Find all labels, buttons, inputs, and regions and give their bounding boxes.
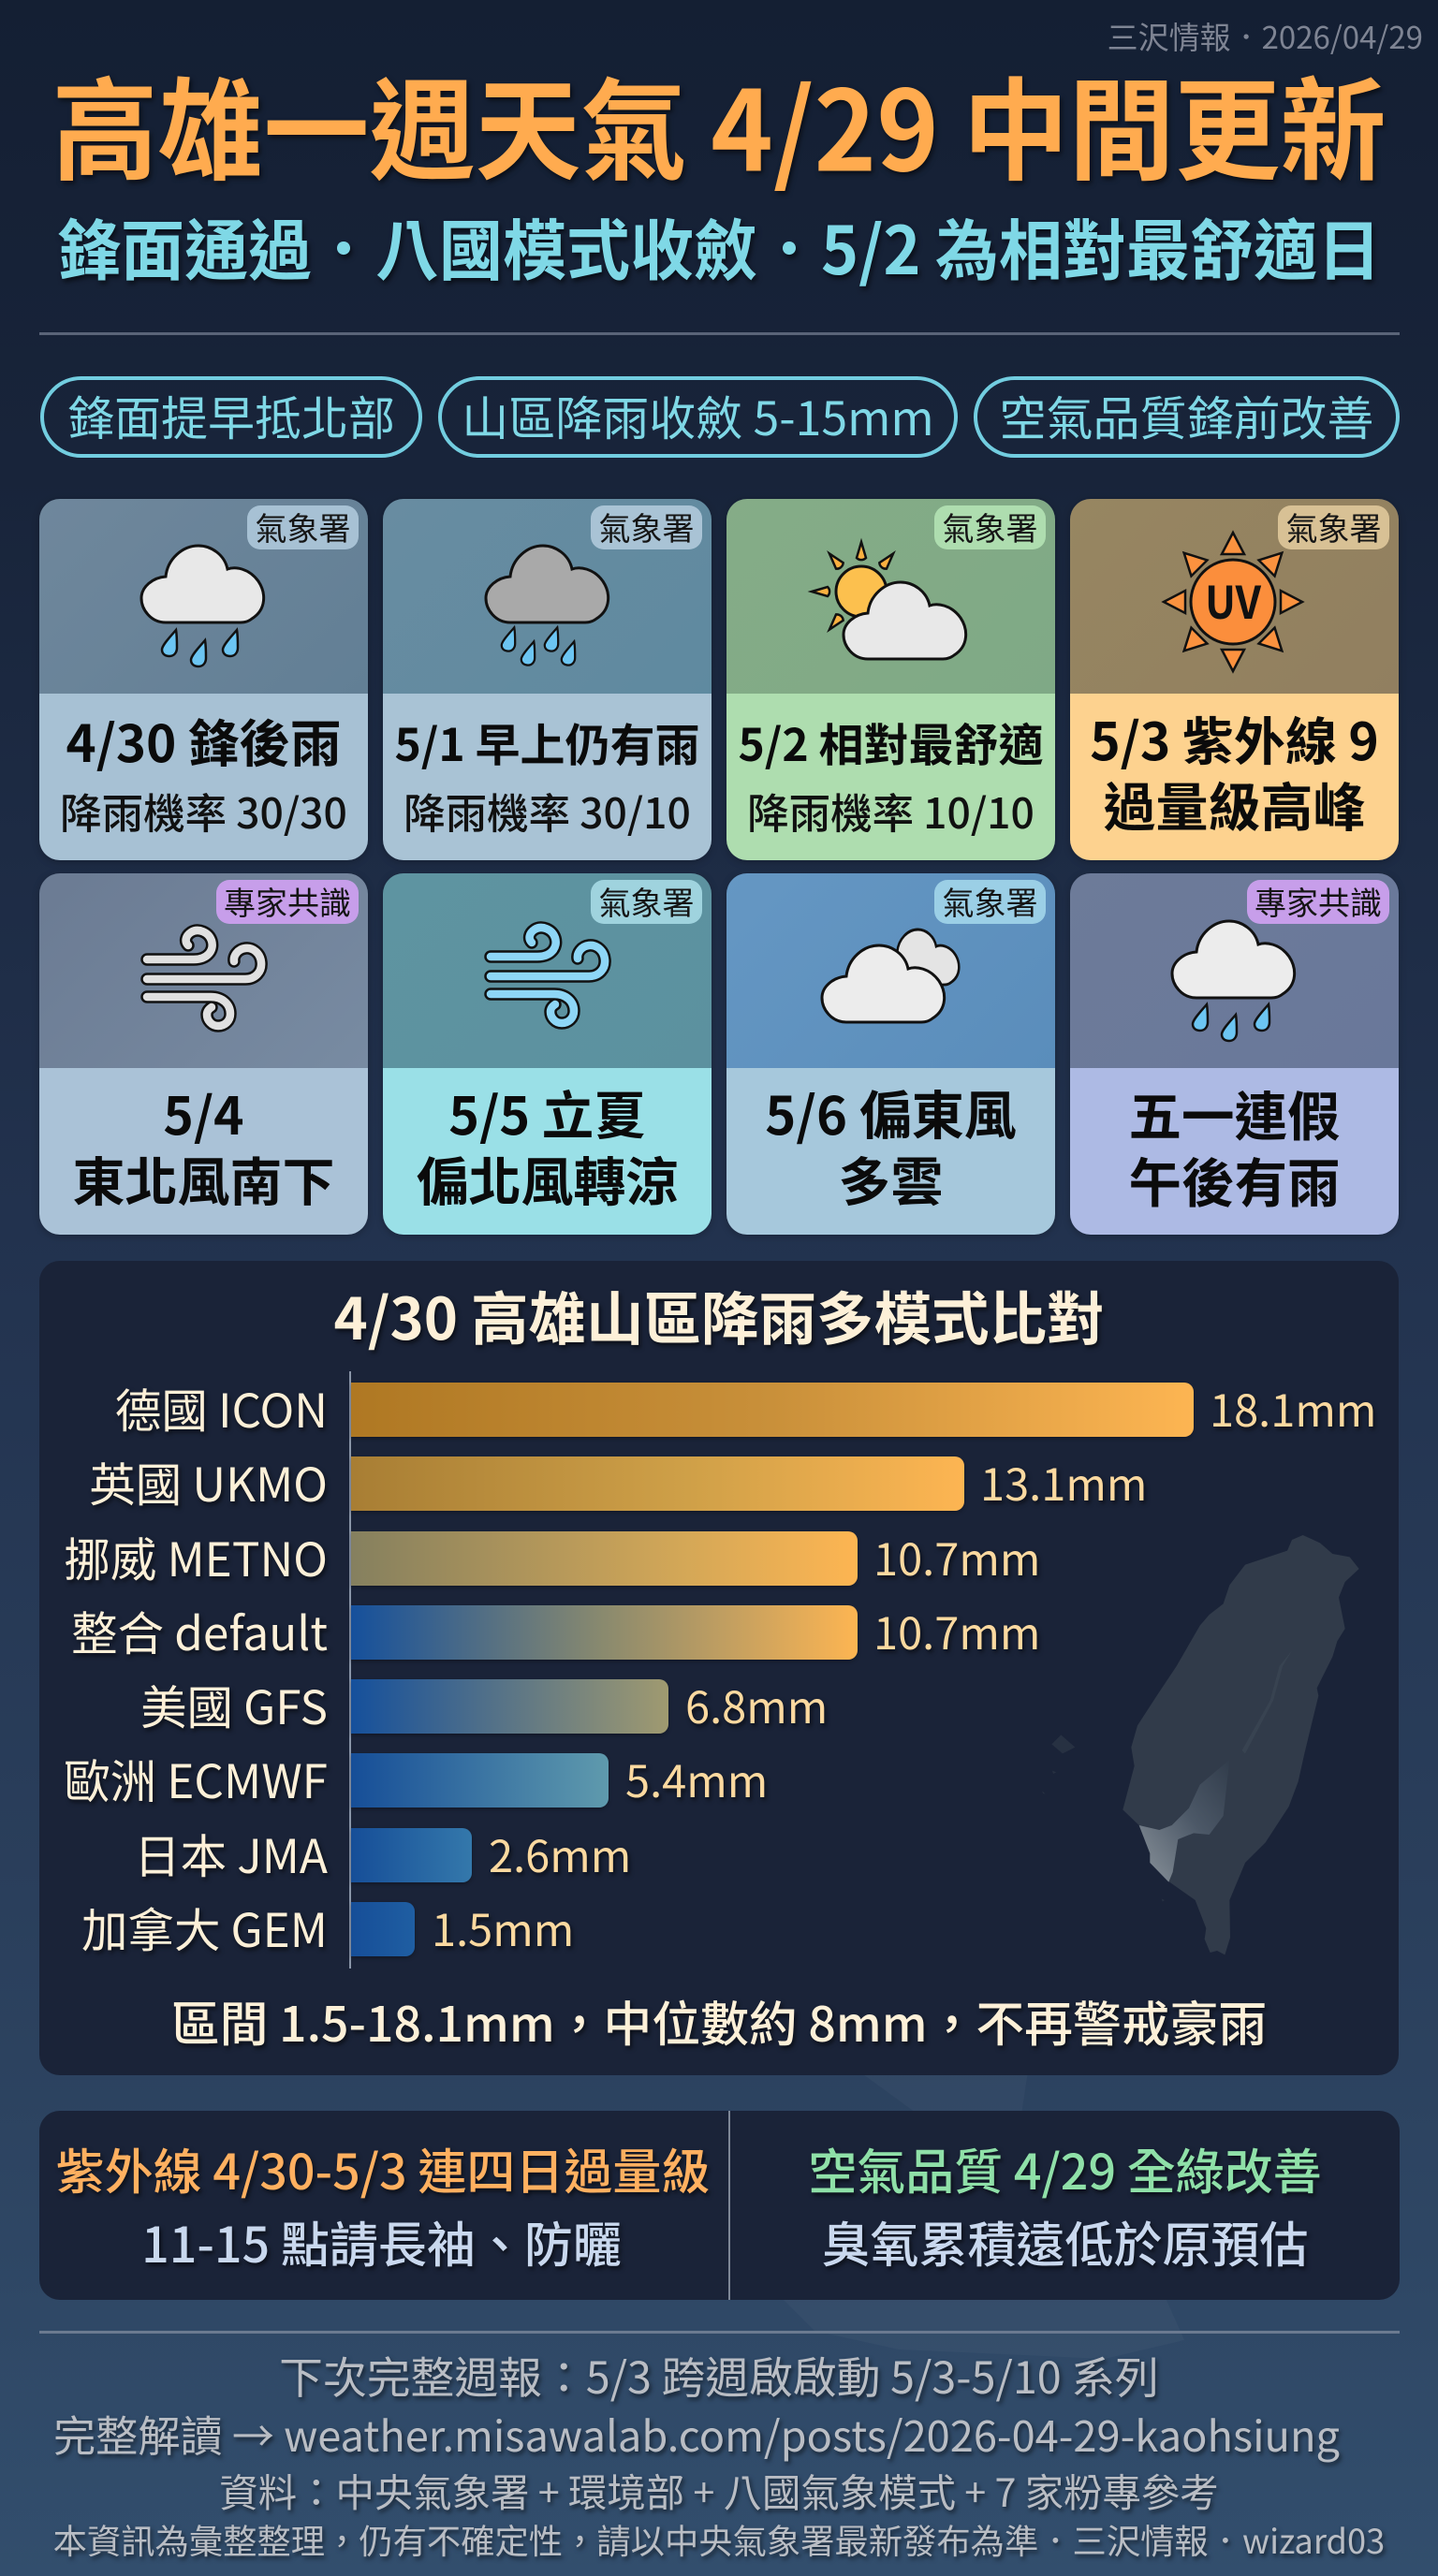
- icon: UV sun: UV: [1205, 566, 1261, 632]
- watermark: source and date: 三沢情報．2026/04/29: [1108, 13, 1423, 58]
- row: default: 10.7mm: [873, 1598, 1040, 1662]
- row: METNO: 挪威 METNO: [64, 1524, 328, 1590]
- row: ECMWF: 歐洲 ECMWF: [64, 1746, 328, 1812]
- row: ECMWF: [64, 1746, 768, 1812]
- icon: UV sun: [1161, 530, 1305, 674]
- bar chart: [64, 1371, 1376, 1969]
- row: JMA: [134, 1821, 631, 1887]
- heading line 2: 偏北風轉涼: [416, 1141, 678, 1217]
- pill: front: 鋒面提早抵北部: [67, 382, 395, 449]
- icon: rain cloud: [140, 545, 266, 668]
- chart title: 4/30 高雄山區降雨多模式比對: [333, 1273, 1105, 1356]
- map: Taiwan silhouette: [1043, 1535, 1359, 1954]
- air quality detail: 臭氧累積遠低於原預估: [821, 2206, 1309, 2276]
- subtitle: 鋒面通過．八國模式收斂．5/2 為相對最舒適日: [57, 198, 1381, 294]
- footer: disclaimer: 本資訊為彙整整理，仍有不確定性，請以中央氣象署最新發布為準．三沢情報．wizard03: [53, 2515, 1385, 2564]
- card: 4/30: [39, 499, 368, 860]
- card: 5/6: [726, 873, 1055, 1235]
- row: default: 整合 default: [71, 1598, 328, 1664]
- footer: next report: 下次完整週報：5/3 跨週啟啟動 5/3-5/10 系列: [279, 2344, 1159, 2407]
- rain probability: 降雨機率 30/30: [60, 780, 347, 841]
- heading line 2: 過量級高峰: [1103, 767, 1365, 842]
- heading line 2: 午後有雨: [1129, 1141, 1341, 1218]
- badge: 氣象署: [942, 878, 1037, 924]
- title: 高雄一週天氣 4/29 中間更新: [51, 42, 1387, 203]
- card: May holiday: [1070, 873, 1399, 1235]
- panel: rainfall model comparison: [39, 1261, 1399, 2075]
- heading line 2: 多雲: [839, 1141, 944, 1217]
- row: ECMWF: 5.4mm: [625, 1746, 768, 1810]
- heading line 1: 5/3 紫外線 9: [1090, 700, 1379, 775]
- row: METNO: 10.7mm: [873, 1524, 1040, 1588]
- row: GEM: 加拿大 GEM: [81, 1895, 328, 1961]
- row: default: [71, 1598, 1040, 1664]
- UV advice: 11-15 點請長袖、防曬: [141, 2206, 622, 2276]
- heading line 1: 五一連假: [1129, 1075, 1341, 1151]
- row: GEM: 1.5mm: [432, 1895, 574, 1959]
- UV heading: 紫外線 4/30-5/3 連四日過量級: [56, 2133, 710, 2203]
- chart summary note: 區間 1.5-18.1mm，中位數約 8mm，不再警戒豪雨: [171, 1985, 1267, 2056]
- card: 5/3: [1070, 499, 1399, 860]
- row: JMA: 日本 JMA: [134, 1821, 328, 1887]
- heading line 1: 5/4: [163, 1075, 244, 1149]
- pill: air quality: 空氣品質鋒前改善: [1000, 382, 1374, 449]
- icon: sun and cloud: [807, 537, 968, 661]
- badge: 氣象署: [599, 504, 695, 549]
- pill row: [40, 376, 1400, 458]
- card: 5/5: [383, 873, 712, 1235]
- card: 5/4: [39, 873, 368, 1235]
- row: ICON: [115, 1375, 1376, 1442]
- badge: 氣象署: [1286, 504, 1382, 549]
- row: METNO: [64, 1524, 1040, 1590]
- badge: 專家共識: [1255, 878, 1382, 924]
- row: GEM: [81, 1895, 574, 1961]
- panel: UV and air quality: [39, 2111, 1400, 2300]
- row: ICON: 德國 ICON: [115, 1375, 328, 1442]
- air quality heading: 空氣品質 4/29 全綠改善: [808, 2133, 1322, 2203]
- heading line 1: 5/5 立夏: [448, 1075, 646, 1149]
- row: JMA: 2.6mm: [489, 1821, 631, 1885]
- heading: 5/1 早上仍有雨: [394, 709, 700, 774]
- icon: two clouds: [820, 929, 961, 1024]
- footer: link: 完整解讀 → weather.misawalab.com/posts/2026-04-29-kaohsiung: [53, 2404, 1340, 2465]
- row: GFS: [140, 1672, 828, 1738]
- icon: rain cloud: [1170, 919, 1296, 1043]
- card: 5/2: [726, 499, 1055, 860]
- row: ICON: 18.1mm: [1210, 1375, 1376, 1440]
- heading line 1: 5/6 偏東風: [765, 1075, 1017, 1150]
- row: GFS: 美國 GFS: [140, 1672, 328, 1738]
- badge: 專家共識: [224, 878, 351, 924]
- rain probability: 降雨機率 30/10: [404, 780, 691, 841]
- card: 5/1: [383, 499, 712, 860]
- footer: sources: 資料：中央氣象署 + 環境部 + 八國氣象模式 + 7 家粉專參考: [219, 2462, 1219, 2518]
- heading: 4/30 鋒後雨: [66, 703, 341, 777]
- icon: dark rain cloud: [485, 545, 610, 666]
- rain probability: 降雨機率 10/10: [747, 780, 1034, 841]
- icon: blue wind: [484, 921, 611, 1030]
- heading line 2: 東北風南下: [73, 1141, 335, 1217]
- heading: 5/2 相對最舒適: [738, 709, 1044, 774]
- pill: mountain rain: 山區降雨收斂 5-15mm: [462, 382, 934, 449]
- icon: wind: [140, 924, 268, 1032]
- row: GFS: 6.8mm: [685, 1672, 828, 1736]
- row: UKMO: 英國 UKMO: [89, 1449, 328, 1515]
- badge: 氣象署: [599, 878, 695, 924]
- badge: 氣象署: [942, 504, 1037, 549]
- row: UKMO: 13.1mm: [980, 1449, 1147, 1514]
- row: UKMO: [89, 1449, 1147, 1515]
- badge: 氣象署: [255, 504, 350, 549]
